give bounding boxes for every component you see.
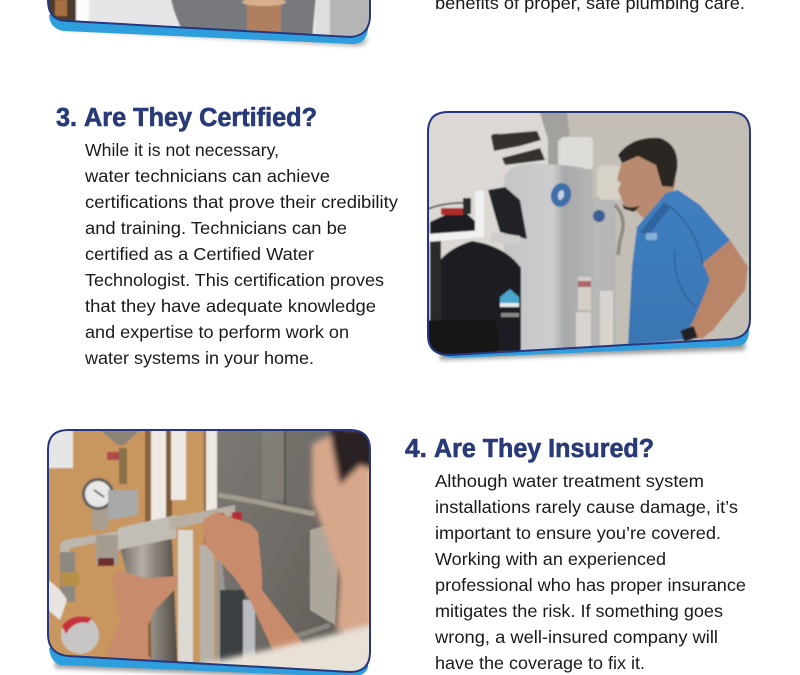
top valve: [100, 430, 140, 445]
section 4 body text: Although water treatment system: [435, 471, 704, 491]
fittings: [59, 530, 118, 553]
section 4 body text: [434, 471, 746, 673]
concrete wall: [217, 430, 345, 675]
section 4 body text: professional who has proper insurance: [435, 575, 746, 595]
man shirt: [628, 190, 730, 345]
section 4 heading: Are They Insured?: [434, 435, 654, 463]
section 3 body text: water technicians can achieve: [84, 166, 330, 186]
section 4 body text: installations rarely cause damage, it’s: [435, 497, 738, 517]
second water heater: [592, 198, 616, 350]
pressure gauge: [82, 478, 114, 530]
section 3 body text: water systems in your home.: [84, 348, 314, 368]
section 3 body text: certifications that prove their credibility: [85, 192, 398, 212]
white vertical pipes: [151, 430, 166, 530]
section 4 heading: 4.: [405, 435, 427, 463]
section 4 body text: Working with an experienced: [435, 549, 666, 569]
man neck and face: [617, 150, 676, 220]
section 3 body text: [84, 140, 398, 368]
section 4 body text: wrong, a well-insured company will: [434, 627, 718, 647]
duct and black pipes: [540, 112, 570, 165]
softener valve head: [488, 187, 527, 239]
section 4 body text: mitigates the risk. If something goes: [435, 601, 723, 621]
section 4 body text: important to ensure you’re covered.: [435, 523, 721, 543]
flex hose: [615, 205, 623, 255]
wood board: [48, 430, 220, 675]
image card: technician inspecting water heater: [428, 112, 752, 362]
section 3 heading: Are They Certified?: [84, 104, 317, 132]
section 3 body text: While it is not necessary,: [85, 140, 279, 160]
blurred worker: [200, 428, 375, 675]
section 3 body text: certified as a Certified Water: [85, 244, 314, 264]
section 3 body text: and expertise to perform work on: [85, 322, 349, 342]
section 3 body text: that they have adequate knowledge: [85, 296, 376, 316]
image card: top technician photo (cropped): [48, 0, 373, 50]
softener tank: [433, 241, 521, 352]
image card: hands installing water filter: [48, 428, 375, 675]
wall: [428, 112, 563, 362]
section 3 heading: 3.: [56, 104, 77, 132]
main water heater: [504, 164, 593, 350]
white pipes: [475, 191, 484, 233]
expansion tank: [597, 165, 623, 200]
upper hand: [203, 512, 308, 655]
filter housing: [120, 540, 178, 662]
red cap: [61, 616, 99, 654]
lower hand: [105, 570, 178, 660]
red handle: [219, 512, 226, 516]
man arm: [683, 240, 748, 340]
man hair: [618, 138, 677, 187]
section 3 body text: and training. Technicians can be: [85, 218, 347, 238]
section 3 body text: Technologist. This certification proves: [85, 270, 384, 290]
section 4 body text: have the coverage to fix it.: [435, 653, 645, 673]
